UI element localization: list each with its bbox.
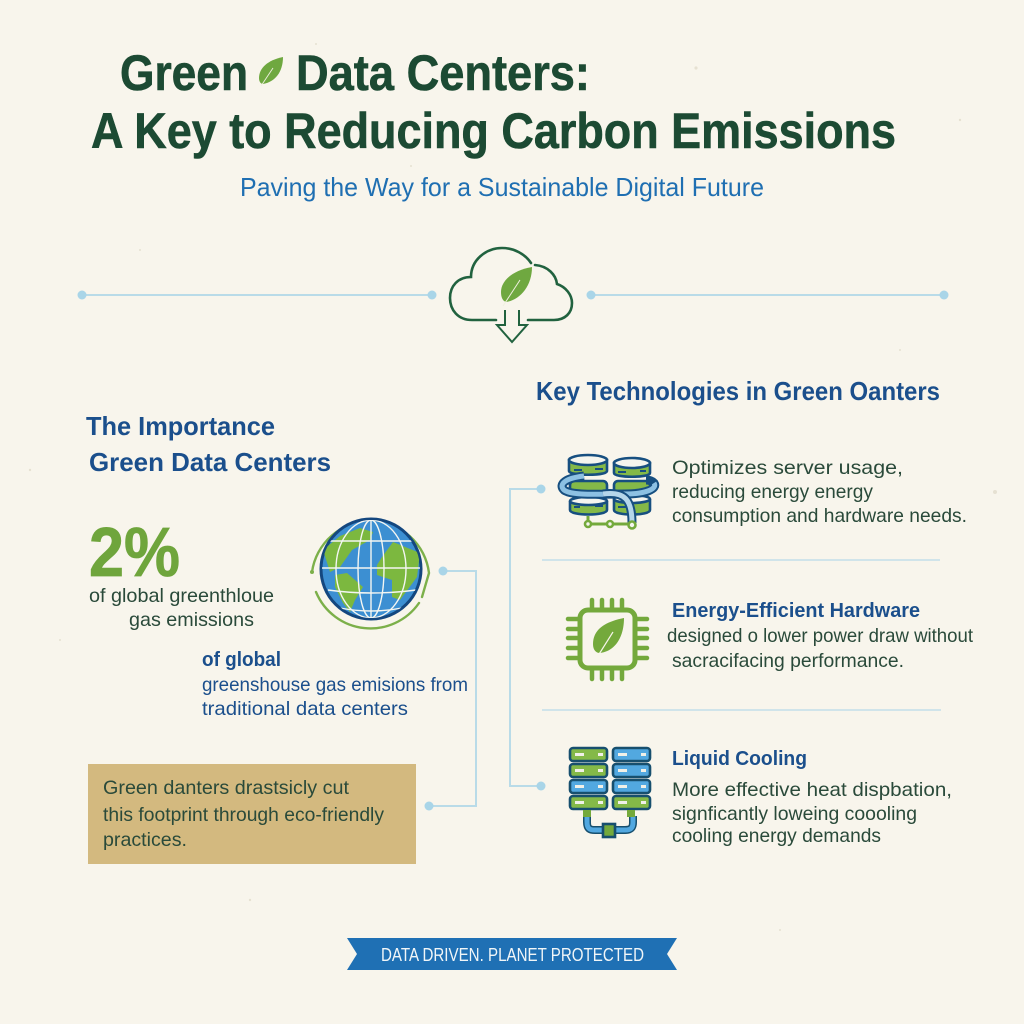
text: liquid cooling: More effective heat dispbation, <box>672 779 952 801</box>
text: virtualization: reducing energy energy <box>672 481 873 503</box>
section heading: importance <box>86 411 331 477</box>
text: energy-efficient hardware: designed o lower power draw without <box>667 625 974 647</box>
text: liquid cooling: signficantly loweing coooling <box>672 803 917 825</box>
text: traditional data center share: of global <box>202 649 281 671</box>
icon: chip with leaf <box>568 600 647 679</box>
title: Data Centers: <box>296 45 590 101</box>
callout: eco-friendly practices: this footprint through eco-friendly <box>103 804 384 826</box>
section heading: importance: The Importance <box>86 411 275 441</box>
callout: eco-friendly practices <box>88 764 416 864</box>
divider: right line <box>586 290 948 300</box>
icon: globe <box>310 519 429 628</box>
divider: left line <box>78 290 436 300</box>
connector: left panel <box>424 566 476 810</box>
text: traditional data center share: traditional data centers <box>202 698 408 720</box>
text: traditional data center share: greenshouse gas emisions from <box>202 674 468 696</box>
text: virtualization <box>672 457 967 527</box>
text: stat caption: gas emissions <box>129 609 254 631</box>
text: stat caption <box>89 585 274 631</box>
text: traditional data center share <box>202 649 468 720</box>
subtitle: Paving the Way for a Sustainable Digital Future <box>240 172 764 202</box>
text: virtualization: Optimizes server usage, <box>672 457 903 479</box>
text: virtualization: consumption and hardware needs. <box>672 505 967 527</box>
text: stat caption: of global greenthloue <box>89 585 274 607</box>
text: energy-efficient hardware: sacracifacing performance. <box>672 650 904 672</box>
title <box>91 45 896 159</box>
icon: liquid cooling racks <box>570 748 650 837</box>
icon: title leaf <box>259 57 283 86</box>
text: liquid cooling: cooling energy demands <box>672 825 881 847</box>
icon: virtualized servers <box>562 455 655 528</box>
banner: tagline: DATA DRIVEN. PLANET PROTECTED <box>381 945 644 965</box>
text: energy-efficient hardware: Energy-Efficient Hardware <box>672 600 920 622</box>
callout: eco-friendly practices: Green danters drastsicly cut <box>103 777 350 799</box>
text: liquid cooling: Liquid Cooling <box>672 748 807 770</box>
icon: cloud with leaf and download arrow <box>450 248 572 342</box>
title: Green <box>120 45 248 101</box>
text: energy-efficient hardware <box>667 600 974 672</box>
callout: eco-friendly practices: practices. <box>103 829 187 851</box>
section heading: key technologies: Key Technologies in Green Oanters <box>536 376 940 406</box>
statistic: 2%: 2% <box>89 513 180 591</box>
banner: tagline <box>347 938 677 970</box>
connector: right panel <box>510 484 546 790</box>
text: liquid cooling <box>672 748 952 847</box>
section heading: importance: Green Data Centers <box>89 447 331 477</box>
title: A Key to Reducing Carbon Emissions <box>91 103 896 159</box>
